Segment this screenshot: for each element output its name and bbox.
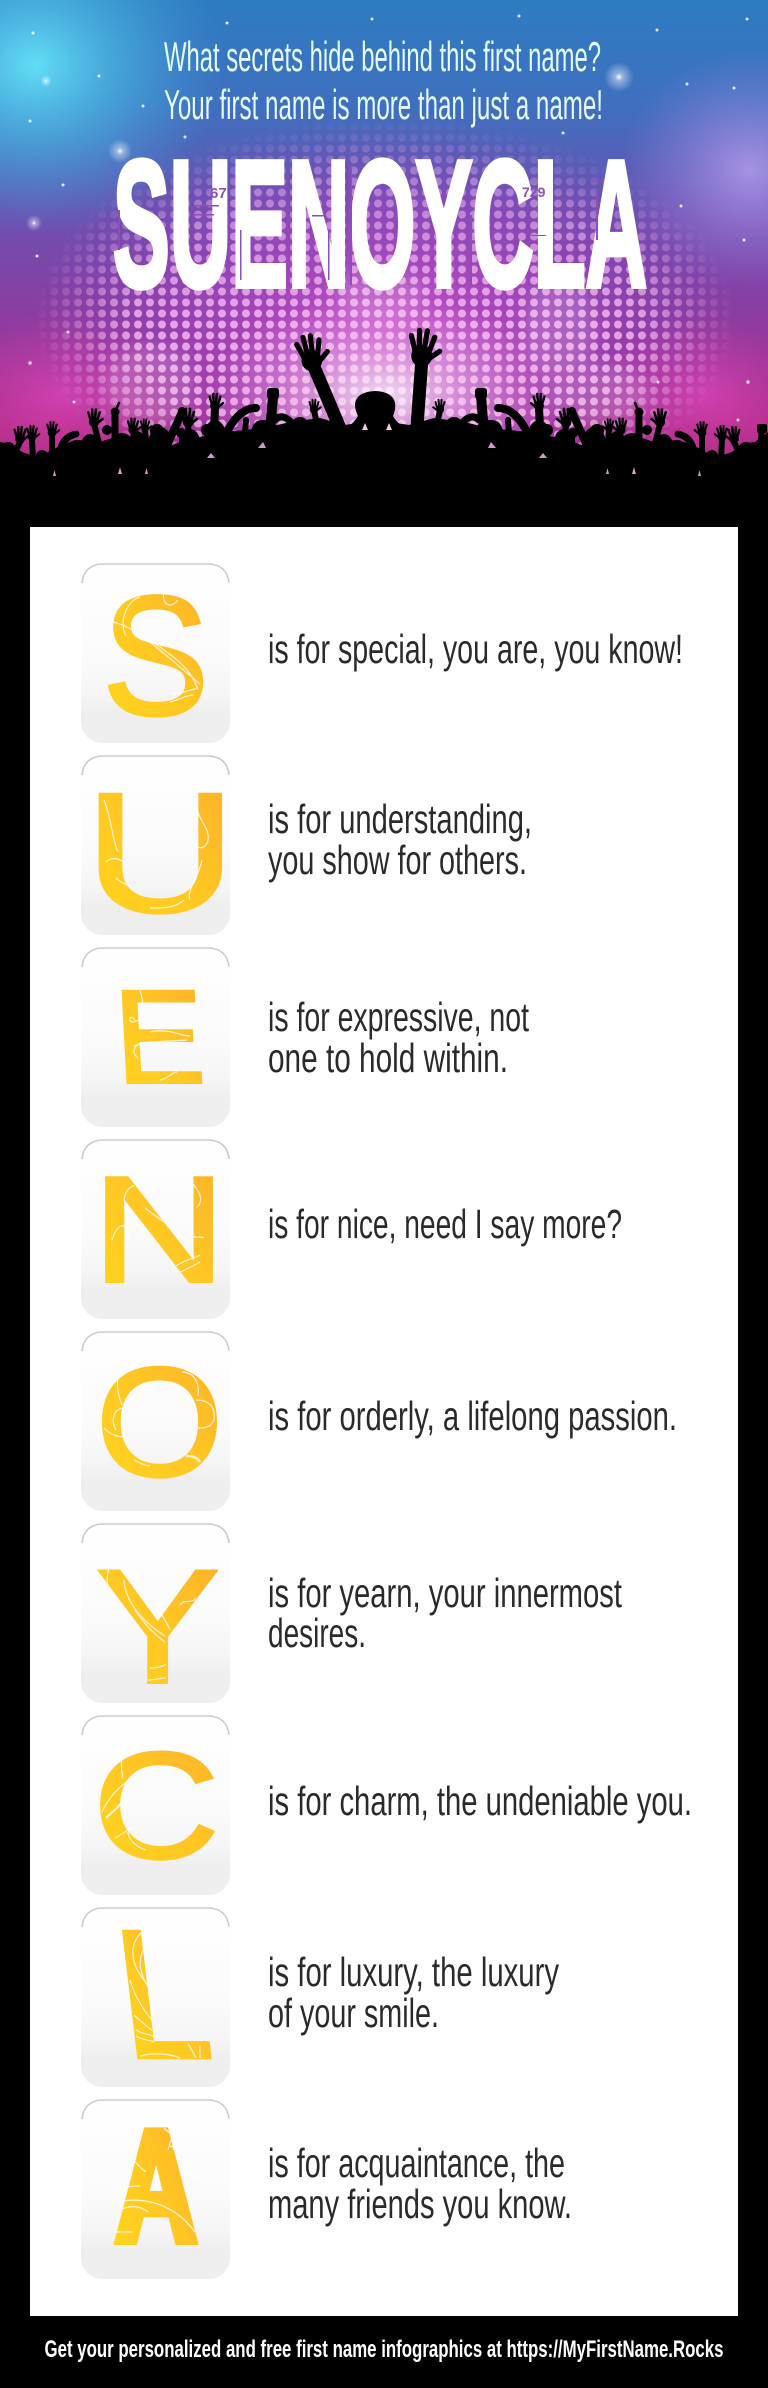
tile: letter E: E	[110, 964, 208, 1111]
tile: letter A: A	[115, 2098, 197, 2274]
heading: tagline	[164, 33, 603, 128]
tile: letter N: N	[92, 1145, 226, 1314]
text: Y lines	[268, 1570, 622, 1656]
text: Y lines: desires.	[268, 1610, 366, 1656]
text: L lines: of your smile.	[268, 1990, 439, 2036]
text: E lines: one to hold within.	[268, 1035, 508, 1081]
text: U lines	[268, 796, 532, 883]
tile: letter U: U	[84, 758, 236, 948]
text: A lines: many friends you know.	[268, 2181, 572, 2227]
row: U	[81, 755, 532, 948]
tile: letter L: L	[106, 1893, 220, 2096]
title: name: 67	[210, 185, 227, 202]
text: N line: is for nice, need I say more?	[268, 1201, 622, 1247]
text: U lines: is for understanding,	[268, 796, 532, 842]
text: E lines: is for expressive, not	[268, 994, 529, 1040]
row: O	[81, 1331, 677, 1511]
row: N	[81, 1139, 622, 1319]
tile: letter O: O	[96, 1335, 223, 1509]
tile: letter A	[81, 2098, 230, 2279]
row: S	[81, 561, 683, 750]
row: Y	[81, 1523, 622, 1717]
tile: letter E	[81, 947, 230, 1127]
text: L lines: is for luxury, the luxury	[268, 1949, 559, 1995]
text: E lines	[268, 994, 529, 1081]
text: U lines: you show for others.	[268, 837, 527, 883]
tile: letter C: C	[93, 1721, 219, 1890]
text: A lines	[268, 2140, 572, 2227]
tile: letter Y: Y	[96, 1536, 219, 1717]
text: A lines: is for acquaintance, the	[268, 2140, 565, 2186]
text: L lines	[268, 1949, 559, 2036]
tile: letter S: S	[102, 561, 209, 750]
text: Y lines: is for yearn, your innermost	[268, 1570, 622, 1616]
panel: concert hero background	[0, 0, 768, 457]
row: A	[81, 2098, 572, 2279]
title: name: 729	[522, 184, 546, 200]
panel: white content	[30, 527, 738, 2316]
row: E	[81, 947, 529, 1127]
illustration: crowd silhouette	[0, 330, 768, 527]
row: C	[81, 1715, 692, 1895]
row: L	[81, 1893, 559, 2096]
